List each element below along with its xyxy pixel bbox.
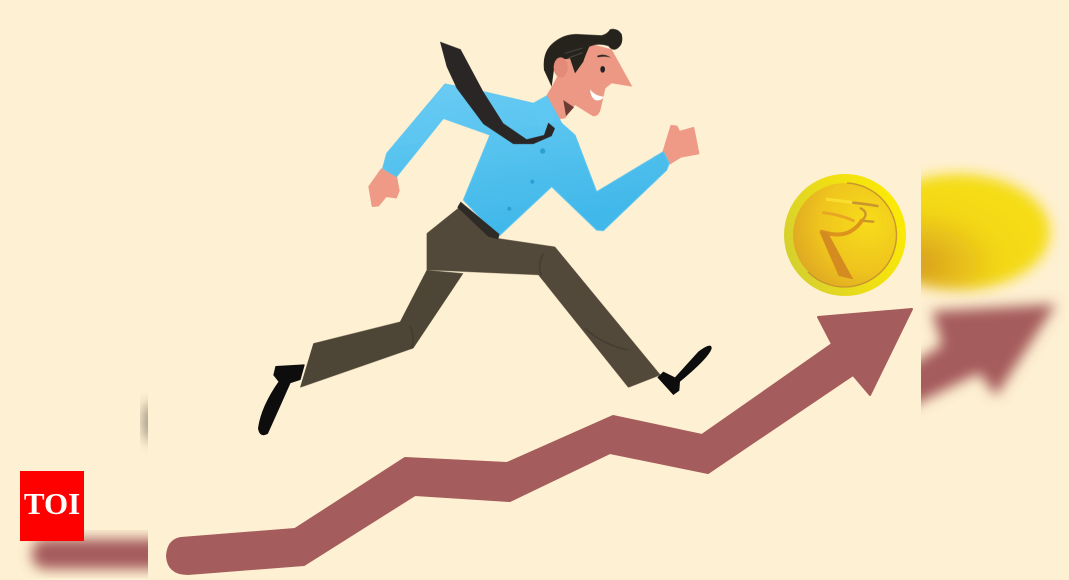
ear	[554, 57, 568, 77]
running man	[259, 29, 712, 435]
tie	[440, 42, 555, 144]
belt	[457, 202, 499, 239]
trousers rear leg	[300, 270, 463, 388]
eye	[600, 66, 605, 73]
rear hand	[369, 169, 399, 206]
hair streaks	[565, 48, 583, 58]
shirt	[383, 84, 669, 237]
face and neck	[547, 40, 632, 120]
blurred background: right side coin and arrow	[921, 164, 1062, 412]
blurred background: left side	[32, 402, 172, 569]
smile	[590, 89, 604, 100]
coin rim line	[808, 183, 896, 287]
icon: front foot shoe	[657, 346, 712, 395]
growth arrow	[167, 309, 912, 574]
shirt buttons	[507, 148, 545, 211]
head	[544, 29, 632, 120]
hair	[544, 29, 622, 87]
eyebrow	[597, 55, 611, 58]
front hand	[663, 126, 698, 163]
icon: rear foot shoe	[259, 365, 304, 435]
icon: rupee symbol	[819, 199, 877, 279]
trousers front leg	[427, 206, 661, 388]
trouser folds	[410, 253, 628, 350]
rupee coin	[784, 174, 906, 296]
neck shadow	[563, 100, 574, 116]
collar	[533, 96, 555, 128]
TOI logo	[20, 471, 84, 541]
TOI logo: TOI	[24, 486, 80, 521]
